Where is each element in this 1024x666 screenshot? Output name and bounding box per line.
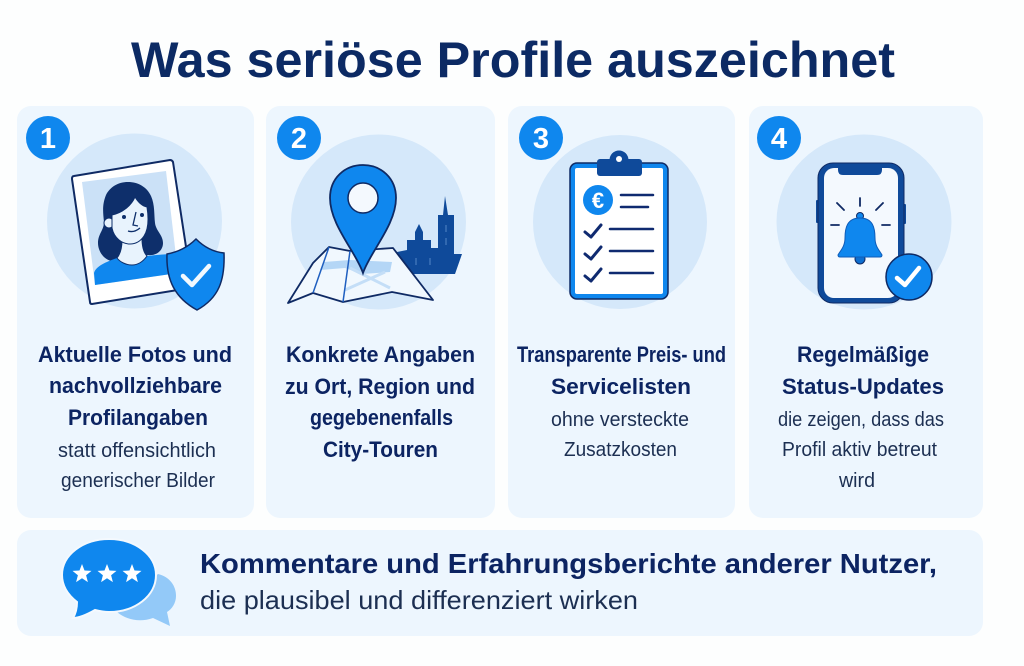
badge: number 1: 1: [40, 123, 56, 155]
text: card 4: die zeigen, dass das: [778, 409, 944, 431]
text: card 2: City-Touren: [323, 437, 438, 462]
icon: euro coin: €: [592, 188, 604, 213]
text: card 4: Profil aktiv betreut: [782, 439, 937, 461]
title: Was seriöse Profile auszeichnet: [131, 32, 895, 88]
text: card 2: [285, 342, 475, 462]
text: card 1: Profilangaben: [68, 405, 208, 430]
text: banner: [200, 548, 937, 615]
text: card 3: Servicelisten: [551, 374, 691, 399]
panel: card 2 location: [266, 106, 495, 518]
text: card 4: Status-Updates: [782, 374, 944, 399]
text: card 3: Zusatzkosten: [564, 439, 677, 461]
icon: smartphone with bell: [816, 163, 932, 303]
icon: check badge: [886, 254, 932, 300]
icon: euro coin: [583, 185, 613, 215]
panel: card 4 status updates: [749, 106, 983, 518]
text: card 3: [517, 342, 726, 461]
badge: number 3: 3: [533, 123, 549, 155]
badge: number 2: [277, 116, 321, 160]
icon: bell: [838, 212, 882, 264]
text: card 2: Konkrete Angaben: [286, 342, 475, 367]
icon: map pin: [330, 165, 396, 273]
icon: folded map: [288, 247, 433, 303]
icon: speech bubbles with stars: [62, 539, 176, 626]
text: card 1: statt offensichtlich: [58, 440, 216, 462]
badge: number 3: [519, 116, 563, 160]
icon: shield check: [167, 239, 224, 310]
text: card 1: [38, 342, 232, 492]
text: card 1: Aktuelle Fotos und: [38, 342, 232, 367]
text: card 1: nachvollziehbare: [49, 373, 222, 398]
text: card 4: Regelmäßige: [797, 342, 929, 367]
panel: card 1 photos: [17, 106, 254, 518]
icon: clipboard checklist: [570, 150, 668, 299]
text: banner: die plausibel und differenziert wirken: [200, 585, 638, 615]
badge: number 1: [26, 116, 70, 160]
panel: comments banner: [17, 530, 983, 636]
text: card 3: ohne versteckte: [551, 409, 689, 431]
text: card 1: generischer Bilder: [61, 470, 215, 492]
text: card 2: gegebenenfalls: [310, 405, 453, 430]
badge: number 4: [757, 116, 801, 160]
icon: city skyline: [397, 196, 462, 274]
text: card 4: wird: [838, 470, 875, 492]
text: card 4: [778, 342, 944, 492]
text: card 3: Transparente Preis- und: [517, 342, 726, 367]
text: card 2: zu Ort, Region und: [285, 374, 475, 399]
icon: portrait photo with shield: [72, 160, 224, 310]
badge: number 4: 4: [771, 123, 787, 155]
badge: number 2: 2: [291, 123, 307, 155]
text: banner: Kommentare und Erfahrungsberichte anderer Nutzer,: [200, 548, 937, 579]
panel: card 3 price list: [508, 106, 735, 518]
